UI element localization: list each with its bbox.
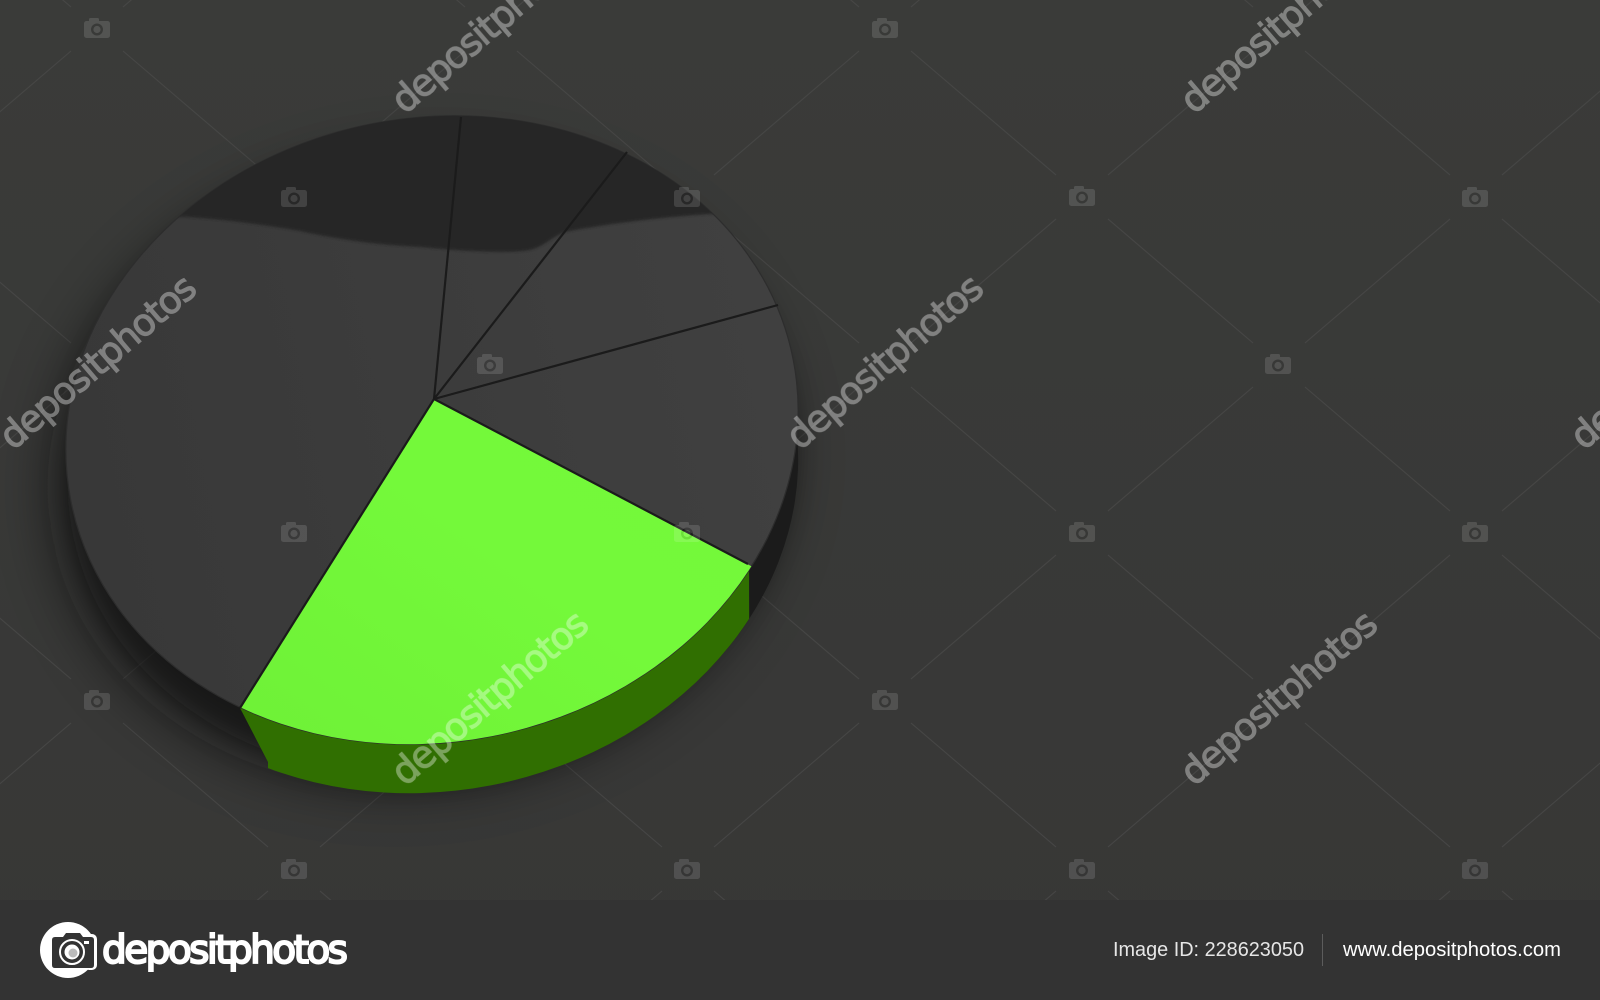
green slice side wall bbox=[240, 571, 750, 794]
website url: www.depositphotos.com bbox=[1342, 939, 1561, 961]
contact shadow under pie bbox=[14, 91, 842, 837]
footer bar bbox=[0, 900, 1600, 1000]
pie chart bbox=[64, 115, 798, 794]
watermark text: depositphotos bbox=[383, 602, 597, 794]
watermark text: depositphotos bbox=[778, 266, 992, 458]
reflected shadow on top face bbox=[180, 116, 712, 252]
image id: Image ID: 228623050 bbox=[1113, 938, 1304, 961]
watermark text bbox=[0, 0, 1600, 794]
watermark camera icons bbox=[84, 18, 1488, 879]
footer divider bbox=[1322, 934, 1323, 966]
slice separator lines bbox=[240, 117, 778, 708]
logo icon: camera in circle bbox=[40, 922, 97, 978]
pie drop shadow bbox=[0, 92, 840, 848]
pie top face bbox=[11, 54, 853, 806]
green pie slice bbox=[242, 400, 752, 744]
logo wordmark: depositphotos bbox=[102, 928, 348, 973]
watermark text: depositphotos bbox=[1172, 602, 1386, 794]
pie side wall bbox=[749, 440, 798, 618]
